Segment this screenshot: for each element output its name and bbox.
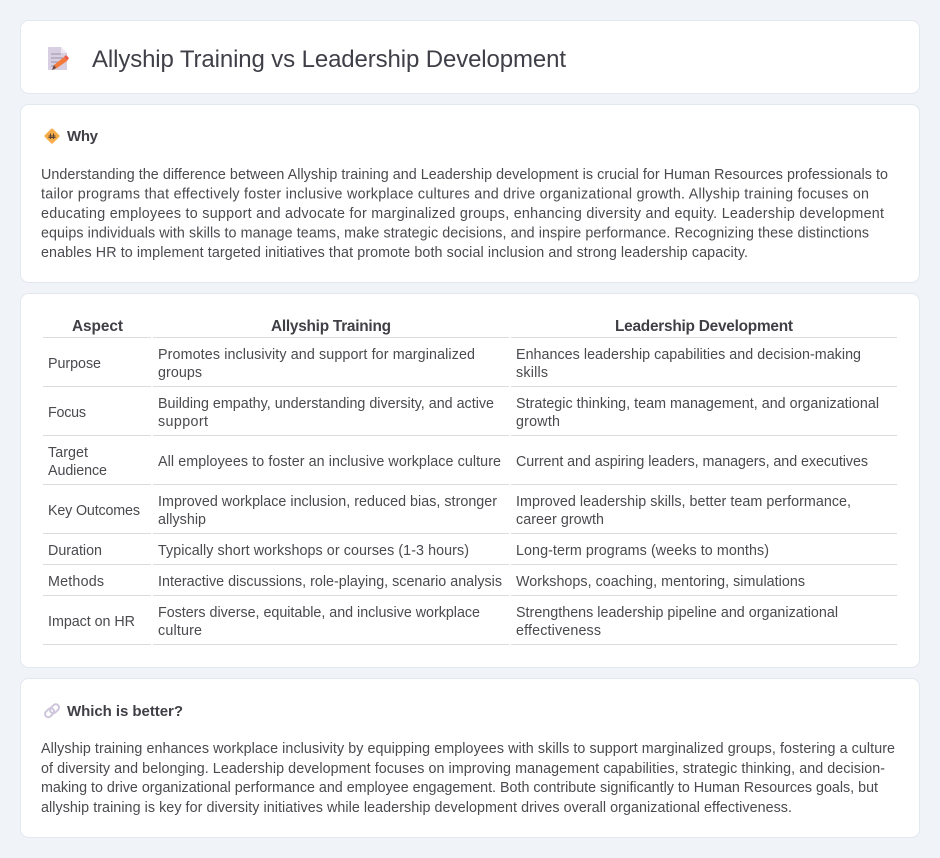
row: target audience: Audience xyxy=(48,463,107,479)
row: impact on hr: Impact on HR xyxy=(48,614,135,630)
row: target audience: Target xyxy=(48,445,88,461)
panel: which is better xyxy=(20,678,920,838)
panel: why xyxy=(20,104,920,282)
row: impact on hr xyxy=(48,605,838,639)
row: focus: growth xyxy=(516,414,560,430)
text block: which is better paragraph: making to drive organizational performance and employee engagement. Both contribute significantly to Human Resources goals, but xyxy=(41,780,878,796)
text block: which is better paragraph: allyship training is key for diversity initiatives while leadership development drives overall organizational effectiveness. xyxy=(41,800,792,816)
table header row xyxy=(72,318,793,335)
text block: which is better paragraph xyxy=(41,741,895,816)
text block: why paragraph: equips individuals with skills to manage teams, make strategic decisions, and inspire performance. Recognizing these distinctions xyxy=(41,226,869,242)
row: purpose: Promotes inclusivity and support for marginalized xyxy=(158,347,475,363)
text block: why paragraph: enables HR to implement targeted initiatives that promote both social inclusion and strong leadership capacity. xyxy=(41,245,748,261)
row: key outcomes: Improved leadership skills, better team performance, xyxy=(516,494,851,510)
row: key outcomes: Improved workplace inclusion, reduced bias, stronger xyxy=(158,494,497,510)
row: impact on hr: culture xyxy=(158,623,202,639)
table header row: Allyship Training xyxy=(271,318,391,335)
row: target audience xyxy=(48,445,868,479)
row: purpose: skills xyxy=(516,365,548,381)
row: purpose: groups xyxy=(158,365,202,381)
row: key outcomes xyxy=(48,494,851,528)
row: target audience: Current and aspiring leaders, managers, and executives xyxy=(516,454,868,470)
panel: comparison table xyxy=(20,294,920,668)
heading: why: Why xyxy=(67,128,99,145)
row: methods: Methods xyxy=(48,574,104,590)
row: impact on hr: effectiveness xyxy=(516,623,601,639)
row: purpose xyxy=(48,347,861,381)
row: impact on hr: Fosters diverse, equitable, and inclusive workplace xyxy=(158,605,480,621)
row: key outcomes: allyship xyxy=(158,512,206,528)
row: key outcomes: career growth xyxy=(516,512,604,528)
row: focus: support xyxy=(158,414,208,430)
row: duration: Typically short workshops or courses (1-3 hours) xyxy=(158,543,469,559)
heading: which is better: Which is better? xyxy=(67,703,183,720)
text block: why paragraph xyxy=(41,167,888,261)
row: methods xyxy=(48,574,805,590)
row: methods: Interactive discussions, role-playing, scenario analysis xyxy=(158,574,502,590)
icon: diamond sign xyxy=(44,128,60,144)
icon: link xyxy=(44,703,60,719)
row: purpose: Enhances leadership capabilities and decision-making xyxy=(516,347,861,363)
row: focus: Strategic thinking, team management, and organizational xyxy=(516,396,879,412)
panel: header xyxy=(20,20,920,94)
row: duration: Long-term programs (weeks to months) xyxy=(516,543,769,559)
row: impact on hr: Strengthens leadership pipeline and organizational xyxy=(516,605,838,621)
text block: why paragraph: tailor programs that effectively foster inclusive workplace cultures and drive organizational growth. Allyship training focuses on xyxy=(41,186,869,202)
text block: which is better paragraph: of diversity and belonging. Leadership development focuses on improving management capabilities, strategic thinking, and decision- xyxy=(41,761,885,777)
row: key outcomes: Key Outcomes xyxy=(48,503,140,519)
row: duration: Duration xyxy=(48,543,102,559)
table header row: Aspect xyxy=(72,318,123,335)
text block: why paragraph: Understanding the difference between Allyship training and Leadership development is crucial for Human Resources professionals to xyxy=(41,167,888,183)
row: methods: Workshops, coaching, mentoring, simulations xyxy=(516,574,805,590)
text block: why paragraph: educating employees to support and advocate for marginalized groups, enhancing diversity and equity. Leadership development xyxy=(41,206,884,222)
row: purpose: Purpose xyxy=(48,356,101,372)
row: focus: Focus xyxy=(48,405,86,421)
title: Allyship Training vs Leadership Development xyxy=(92,46,566,73)
row: focus: Building empathy, understanding diversity, and active xyxy=(158,396,494,412)
table header row: Leadership Development xyxy=(615,318,793,335)
icon: memo with pencil xyxy=(48,47,69,70)
row: duration xyxy=(48,543,769,559)
row: focus xyxy=(48,396,879,430)
row: target audience: All employees to foster an inclusive workplace culture xyxy=(158,454,501,470)
text block: which is better paragraph: Allyship training enhances workplace inclusivity by equipping employees with skills to support marginalized groups, fostering a culture xyxy=(41,741,895,757)
